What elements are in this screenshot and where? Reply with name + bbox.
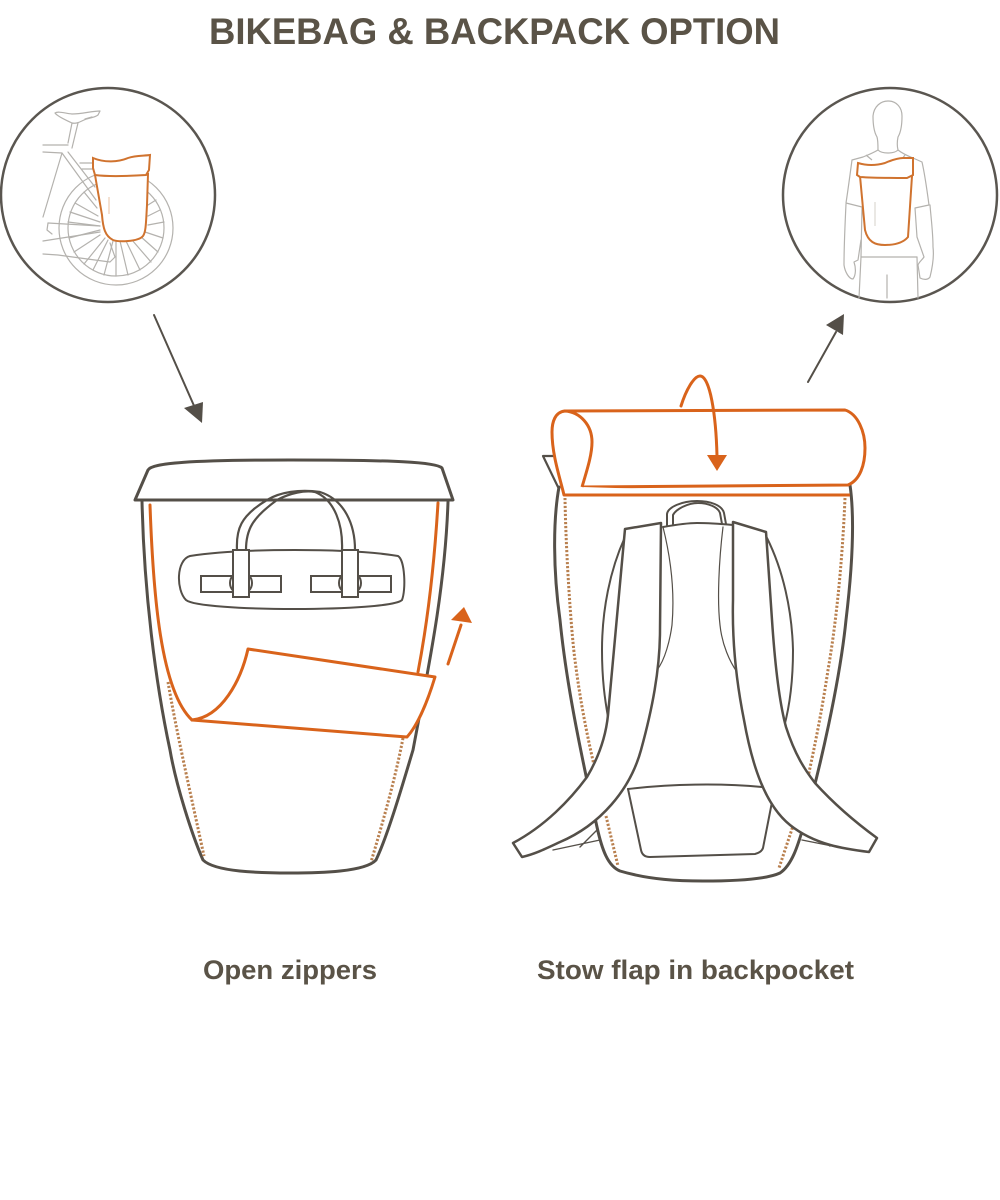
left shoulder strap xyxy=(513,523,661,857)
title: BIKEBAG & BACKPACK OPTION xyxy=(209,11,780,52)
bag body xyxy=(142,501,448,873)
roll-top flap xyxy=(552,410,865,495)
handle mount plate xyxy=(179,550,404,609)
stitched seams xyxy=(565,498,594,765)
backpack body xyxy=(555,485,853,881)
arrow: roll flap down xyxy=(681,376,727,471)
icon: bicycle with pannier in circle xyxy=(1,88,215,302)
arrow: pull flap up xyxy=(448,607,472,664)
right shoulder strap xyxy=(733,522,877,852)
handle straps xyxy=(237,491,355,550)
back tab xyxy=(543,456,558,487)
side padding xyxy=(602,537,625,717)
caption: open zippers: Open zippers xyxy=(203,955,377,985)
arrow: bike icon to bag xyxy=(154,315,203,423)
back panel contours xyxy=(657,527,673,670)
backpack conversion xyxy=(513,376,877,881)
top handle xyxy=(667,501,726,525)
pannier bag with zippers opened xyxy=(135,460,472,873)
side straps xyxy=(553,830,847,850)
caption: stow flap: Stow flap in backpocket xyxy=(537,955,854,985)
lid xyxy=(135,460,453,500)
opened flap xyxy=(192,649,435,737)
orange zipper lines xyxy=(150,505,192,720)
bottom pocket xyxy=(628,785,762,789)
arrow: backpack to person icon xyxy=(808,314,844,382)
stitched seams xyxy=(168,682,204,856)
icon: person wearing backpack in circle xyxy=(783,88,997,302)
